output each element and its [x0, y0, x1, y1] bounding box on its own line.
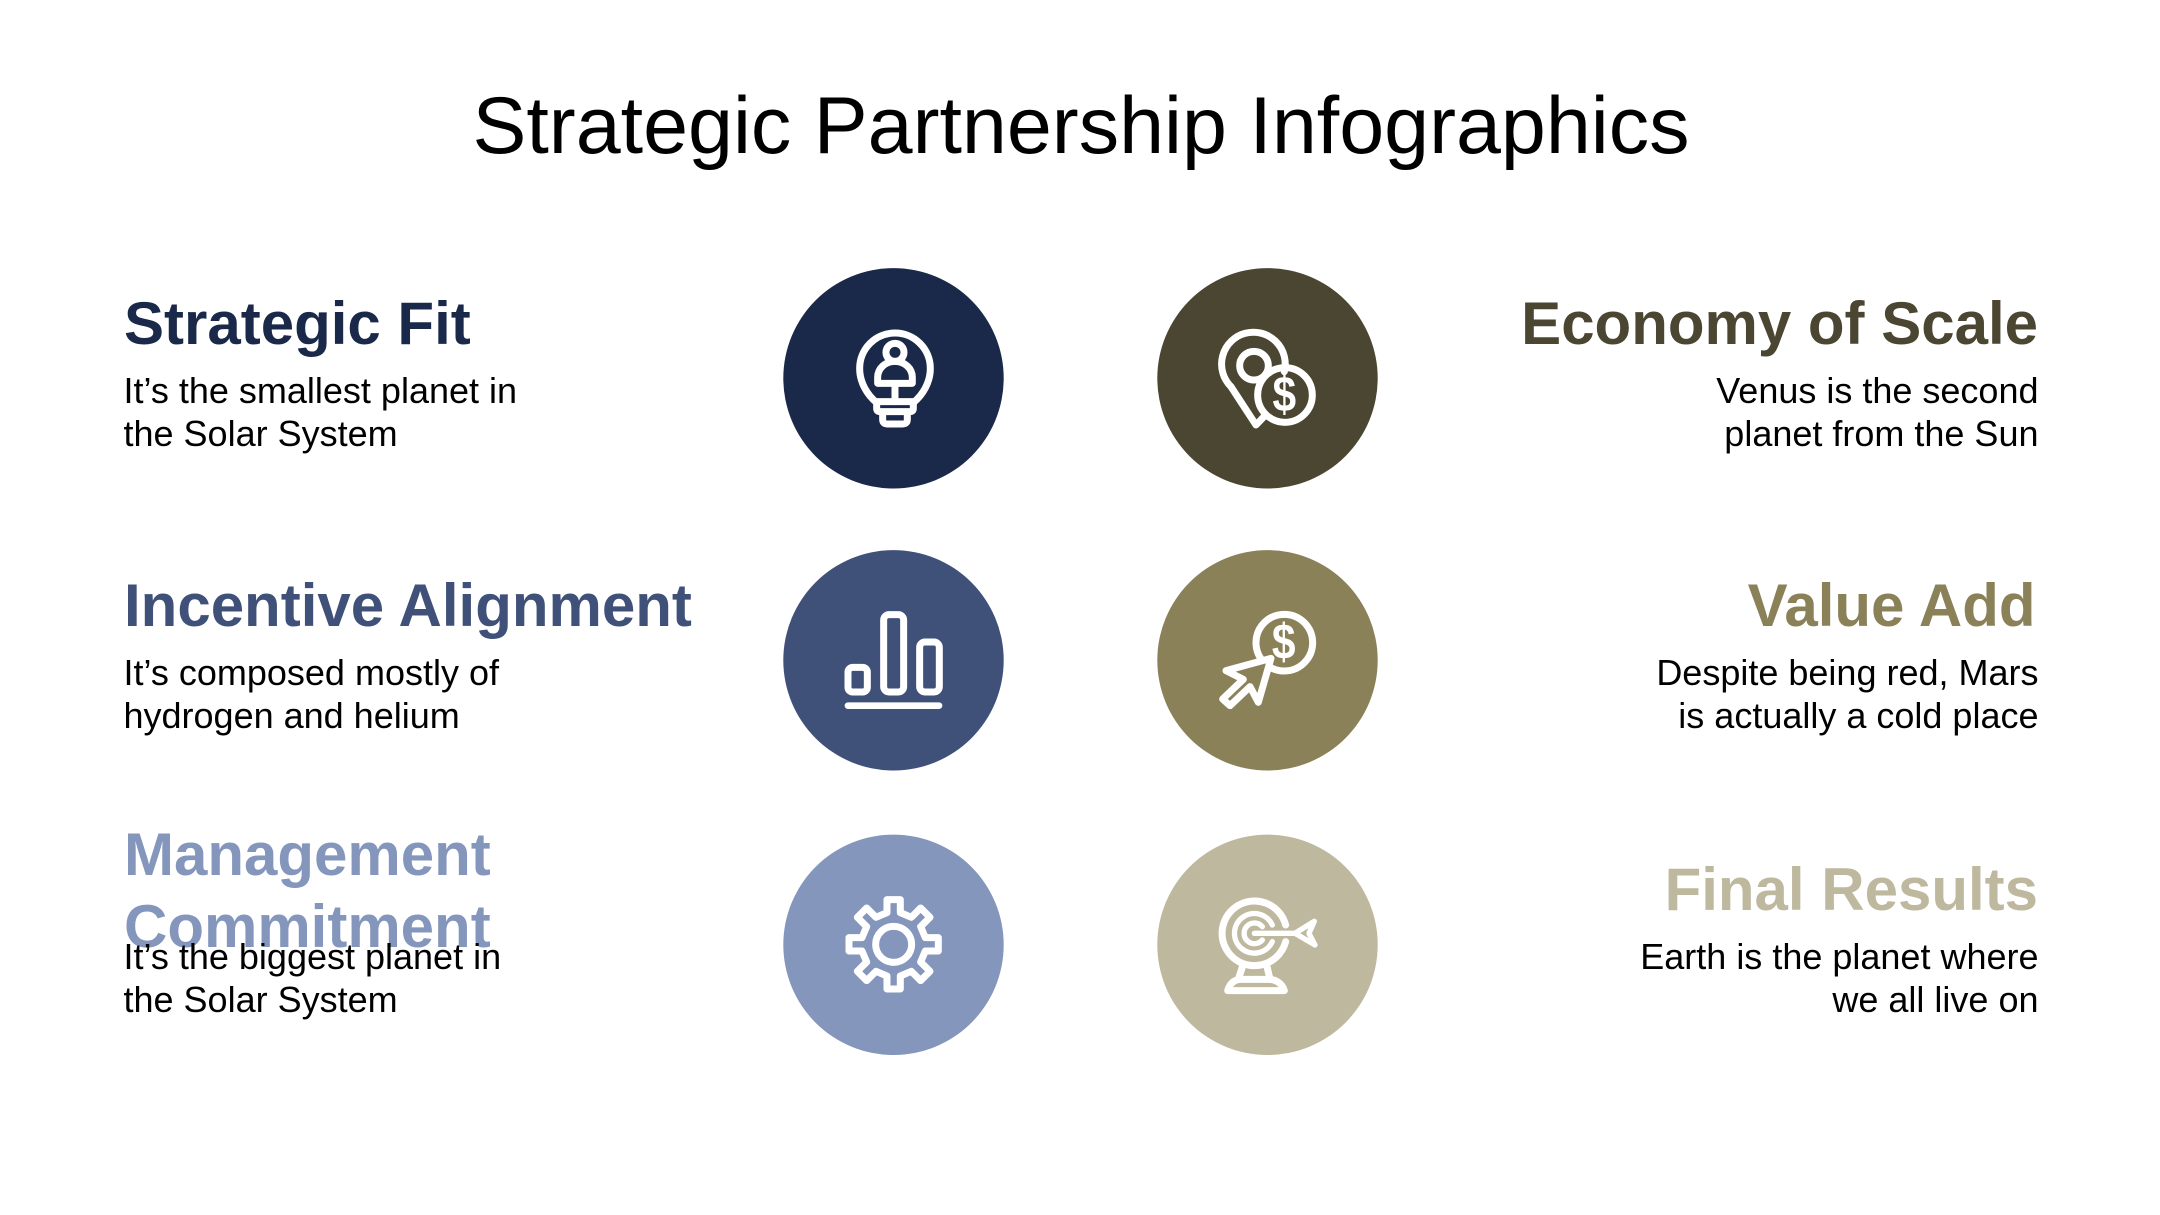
icon: target with arrow	[1222, 901, 1315, 991]
panel: management commitment text	[124, 821, 501, 1020]
panel: economy of scale text	[1521, 290, 2038, 454]
circle: value add	[1157, 550, 1378, 770]
heading: incentive alignment: Incentive Alignment	[124, 572, 692, 639]
panel: incentive alignment text	[124, 572, 692, 736]
heading: management commitment: Commitment	[124, 893, 491, 960]
icon: gear	[849, 900, 938, 989]
text: economy of scale description: Venus is the second	[1716, 370, 2038, 411]
circle: economy of scale	[1157, 268, 1378, 488]
circle: management commitment	[783, 835, 1004, 1055]
icon: lightbulb with person	[860, 333, 930, 424]
text: value add description: Despite being red, Mars	[1656, 652, 2038, 693]
heading: strategic fit: Strategic Fit	[124, 290, 471, 357]
circle: strategic fit	[783, 268, 1004, 488]
circle: incentive alignment	[783, 550, 1004, 770]
icon: bar chart	[848, 615, 939, 706]
text: value add description: is actually a cold place	[1678, 695, 2038, 736]
heading: economy of scale: Economy of Scale	[1521, 290, 2038, 357]
text: strategic fit description: the Solar System	[124, 413, 398, 454]
icon: cursor clicking dollar coin	[1223, 614, 1313, 706]
icon: map pin with dollar coin: $	[1273, 366, 1296, 422]
icon: cursor clicking dollar coin: $	[1272, 614, 1296, 670]
heading: final results: Final Results	[1665, 856, 2038, 923]
text: final results description: Earth is the planet where	[1640, 936, 2038, 977]
heading: value add: Value Add	[1748, 572, 2036, 639]
text: incentive alignment description: It’s composed mostly of	[124, 652, 500, 693]
panel: value add text	[1656, 572, 2038, 736]
panel: strategic fit text	[124, 290, 517, 454]
circle: final results	[1157, 835, 1378, 1055]
title: Strategic Partnership Infographics	[472, 81, 1690, 171]
text: final results description: we all live on	[1831, 979, 2038, 1020]
text: economy of scale description: planet from the Sun	[1724, 413, 2038, 454]
text: incentive alignment description: hydrogen and helium	[124, 695, 460, 736]
heading: management commitment: Management	[124, 821, 491, 888]
text: management commitment description: It’s the biggest planet in	[124, 936, 501, 977]
icon: map pin with dollar coin	[1222, 332, 1312, 425]
panel: final results text	[1640, 856, 2038, 1020]
text: management commitment description: the Solar System	[124, 979, 398, 1020]
text: strategic fit description: It’s the smallest planet in	[124, 370, 517, 411]
